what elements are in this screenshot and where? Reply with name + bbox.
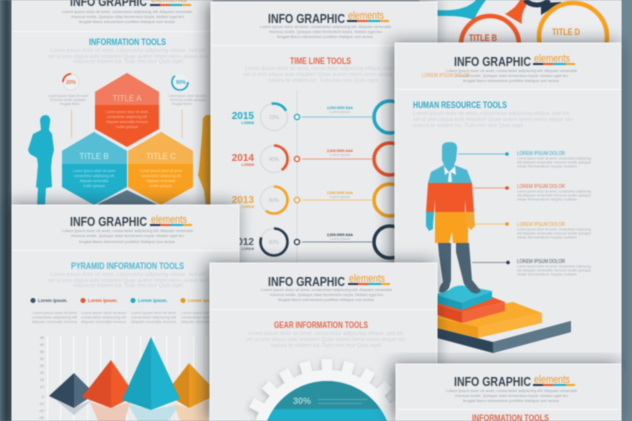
- row: 2013: 2013: [232, 195, 254, 206]
- legend descriptions: consectetur adipiscing elit: [131, 316, 176, 320]
- row: 2012: LOREM: [241, 247, 254, 251]
- callout lines and labels: elit aliquam venenatis rhoncus mollis quisque: [517, 160, 591, 164]
- header: elements: [534, 374, 570, 386]
- axis labels: 20: [40, 371, 44, 375]
- header: INFO GRAPHIC: [454, 54, 531, 69]
- panel: gear information tools: [210, 263, 437, 421]
- row: 2013: [232, 184, 406, 216]
- callout lines and labels: Lorem ipsum dolor sit amet, consectetur adipiscing: [517, 156, 591, 160]
- header: [62, 214, 193, 244]
- legend descriptions: Aliquam venenatis rhoncus: [32, 320, 77, 324]
- header: feugiat libero elementum porttitor tristique non lectus: [278, 297, 374, 302]
- header: Lorem ipsum dolor sit amet, consectetur adipiscing elit. Aliquam venenatis: [446, 388, 577, 393]
- pyramid: orange: [82, 360, 133, 408]
- row: 2015: LOREM: [241, 121, 254, 125]
- axis labels: 0: [42, 395, 44, 399]
- axis labels: 40: [40, 343, 44, 347]
- header: INFO GRAPHIC: [268, 11, 345, 26]
- hexagon: title A: mollis quisque: [116, 125, 138, 129]
- legend descriptions: consectetur adipiscing elit: [181, 316, 226, 320]
- captions: [48, 94, 206, 106]
- icon: business person figure: [426, 142, 481, 294]
- captions: feugiat libero: [172, 102, 192, 106]
- callout lines and labels: LOREM IPSUM DOLOR: [517, 259, 565, 265]
- hexagon: title B: [62, 132, 127, 205]
- row: 2014: 40%: [269, 157, 280, 163]
- hexagon: title B: TITLE B: [79, 152, 109, 161]
- hexagon: title B: mollis quisque: [83, 184, 105, 188]
- hexagon: title A: consectetur adipiscing elit: [107, 115, 147, 119]
- header: [62, 0, 192, 24]
- axis labels: -30: [38, 416, 44, 420]
- row: 2014: 2,000.0000 AAA: [327, 149, 353, 153]
- heading: GEAR INFORMATION TOOLS: [274, 320, 368, 330]
- intro text: Lorem ipsum dolor sit amet, consectetur adipiscing elitque, sed elit: [248, 331, 404, 337]
- row: 2015: 20%: [269, 115, 280, 121]
- hexagon: title D, grey: [96, 190, 158, 205]
- intro text: Lorem ipsum dolor sit amet, consectetur adipiscing elitque, sed elit: [50, 272, 206, 278]
- connector: dark: [541, 2, 562, 15]
- callout lines and labels: vitae fermentum turpis nullam: [517, 164, 577, 168]
- chart: pyramid columns: [38, 336, 210, 421]
- hexagon: title B: consectetur adipiscing elit: [74, 174, 114, 178]
- connector: orange: [505, 0, 530, 24]
- legend descriptions: Aliquam venenatis rhoncus: [181, 320, 226, 324]
- intro text: Lorem ipsum dolor sit amet, consectetur adipiscing elitque, sed elit: [50, 48, 206, 54]
- row: 2012: [232, 226, 406, 258]
- callout lines and labels: Lorem ipsum dolor sit amet, consectetur adipiscing: [517, 190, 591, 194]
- legend: Lorem ipsum.: [138, 298, 168, 303]
- panel: information tools bottom right: [396, 364, 621, 421]
- gauge: 20%: 20%: [66, 80, 77, 86]
- header: elements: [534, 53, 570, 65]
- intro text: vel ut sem aliqua aute requiem! Quae autem lorem nemo aeque nec: [246, 337, 407, 343]
- hexagon: title C: TITLE C: [146, 152, 176, 161]
- ring: dark: [525, 0, 549, 5]
- header: feugiat libero elementum porttitor tristique non lectus: [79, 19, 175, 24]
- row: 2014: [232, 143, 406, 175]
- pyramid: teal: [122, 337, 180, 410]
- row: 2015: 2,000.0000 AAA: [327, 106, 353, 110]
- pyramid: amber: [172, 363, 210, 408]
- icon: figure silhouette amber: [198, 115, 212, 205]
- chart: gear: [249, 359, 405, 421]
- header: rhoncus mollis. Quisque vitae fermentum turpis. Nullam eget leo: [270, 292, 384, 297]
- intro text: [246, 331, 407, 349]
- header: rhoncus mollis. Quisque vitae fermentum turpis. Nullam eget leo: [455, 73, 569, 78]
- legend descriptions: Lorem ipsum dolor sit amet: [181, 311, 226, 315]
- reflections: [56, 400, 208, 421]
- legend: Lorem ipsum.: [188, 298, 218, 303]
- callout lines and labels: Lorem ipsum dolor sit amet, consectetur adipiscing: [517, 228, 591, 232]
- header: feugiat libero elementum porttitor tristique non lectus: [277, 34, 373, 39]
- header: [261, 273, 392, 302]
- row: 2013: LOREM: [241, 205, 254, 209]
- heading: HUMAN RESOURCE TOOLS: [413, 100, 507, 110]
- header: rhoncus mollis. Quisque vitae fermentum turpis. Nullam eget leo: [71, 14, 185, 19]
- hexagon: title B: Aliquam venenatis: [80, 179, 109, 183]
- intro text: [48, 272, 209, 289]
- axis labels: 45: [40, 336, 44, 340]
- gauge: 20%: [63, 74, 79, 90]
- panel: top right circles: [420, 0, 621, 74]
- hexagon: title C: Aliquam venenatis: [147, 179, 176, 183]
- row: 2012: 2012: [232, 237, 254, 248]
- legend: [30, 298, 218, 303]
- header: rhoncus mollis. Quisque vitae fermentum turpis. Nullam eget leo: [269, 29, 383, 34]
- header: Lorem ipsum dolor sit amet, consectetur adipiscing elit. Aliquam venenatis: [446, 68, 577, 73]
- pyramid: dark: [49, 373, 92, 408]
- hexagon: title C: consectetur adipiscing elit: [141, 174, 181, 178]
- label: title D: TITLE D: [552, 27, 580, 37]
- hexagon: title C: mollis quisque: [150, 184, 172, 188]
- axis labels: 30: [40, 357, 44, 361]
- ring: title D: [539, 3, 607, 71]
- row: 2015: Lorem ipsum: [330, 110, 350, 114]
- captions: rhoncus mollis quisque: [50, 98, 86, 102]
- intro text: [413, 111, 574, 129]
- legend descriptions: consectetur adipiscing elit: [32, 316, 77, 320]
- intro text: natura te eiatem lor. Tum min mor Quis eget: [413, 123, 524, 129]
- axis labels: 25: [40, 364, 44, 368]
- axis labels: 15: [40, 378, 44, 382]
- row: 2013: 60%: [269, 198, 280, 204]
- row: 2012: Lorem ipsum: [330, 237, 350, 241]
- intro text: Lorem ipsum dolor sit amet, consectetur adipiscing elitque, sed elit: [413, 111, 570, 117]
- intro text: vel ut sem aliqua aute requiem! Quae autem lorem nemo aeque nec: [48, 54, 209, 60]
- row: 2014: LOREM: [241, 163, 254, 167]
- callout lines and labels: vitae fermentum turpis nullam: [517, 272, 577, 276]
- intro text: natura te eiatem lor. Tum min mor Quis eget: [268, 78, 379, 84]
- hexagon: title A: TITLE A: [113, 94, 142, 103]
- intro text: natura te eiatem lor. Tum min mor Quis eget: [73, 59, 184, 65]
- row: 2012: 2,000.0000 AAA: [327, 233, 353, 237]
- callout lines and labels: vitae fermentum turpis nullam: [517, 236, 577, 240]
- axis labels: 35: [40, 350, 44, 354]
- header: [260, 10, 391, 39]
- header: [446, 374, 577, 403]
- axis labels: [38, 336, 44, 420]
- gauge: 90%: 90%: [176, 80, 187, 86]
- header: [446, 53, 577, 83]
- row: 2012: 80%: [269, 240, 280, 246]
- legend descriptions: Aliquam venenatis rhoncus: [131, 320, 176, 324]
- captions: Lorem ipsum dolor sit amet: [168, 94, 206, 98]
- hexagon: title A: Aliquam venenatis rhoncus: [106, 120, 148, 124]
- intro text: vel ut sem aliqua aute requiem! Quae autem lorem nemo aeque nec: [413, 117, 574, 123]
- intro text: [243, 66, 404, 84]
- header: Lorem ipsum dolor sit amet, consectetur adipiscing elit. Aliquam venenatis: [260, 24, 391, 29]
- hexagon: title C: [128, 132, 193, 205]
- captions: rhoncus mollis quisque: [170, 98, 206, 102]
- legend descriptions: Lorem ipsum dolor sit amet: [32, 311, 77, 315]
- hexagon: title B: Lorem ipsum dolor sit amet: [73, 169, 115, 173]
- panel: time line tools: [211, 2, 437, 264]
- header: INFO GRAPHIC: [454, 374, 531, 389]
- heading: TIME LINE TOOLS: [290, 56, 351, 66]
- callout lines and labels: elit aliquam venenatis rhoncus mollis quisque: [517, 194, 591, 198]
- row: 2014: 2014: [232, 153, 254, 164]
- legend descriptions: Lorem ipsum dolor sit amet: [81, 311, 126, 315]
- callout lines and labels: elit aliquam venenatis rhoncus mollis quisque: [517, 268, 591, 272]
- hexagon: title A: [95, 73, 159, 147]
- captions: Lorem ipsum dolor sit amet: [48, 94, 88, 98]
- intro text: natura te eiatem lor. Tum min mor Quis eget: [271, 343, 382, 349]
- legend descriptions: Lorem ipsum dolor sit amet: [131, 311, 176, 315]
- dial value: 30%: [293, 396, 311, 406]
- header: rhoncus mollis. Quisque vitae fermentum turpis. Nullam eget leo: [455, 393, 569, 398]
- row: 2013: 2,000.0000 AAA: [327, 191, 353, 195]
- captions: feugiat libero: [60, 102, 80, 106]
- gear dial: [267, 381, 387, 421]
- header: Lorem ipsum dolor sit amet, consectetur adipiscing elit. Aliquam venenatis: [62, 9, 192, 14]
- callout lines and labels: LOREM IPSUM DOLOR: [517, 151, 565, 157]
- header: elements: [348, 10, 384, 22]
- axis labels: -10: [38, 402, 44, 406]
- intro text: natura te eiatem lor. Tum min mor Quis eget: [73, 283, 184, 289]
- legend: Lorem ipsum.: [38, 298, 68, 303]
- intro text: [48, 48, 209, 65]
- label: title B: TITLE B: [469, 33, 497, 43]
- intro text: vel ut sem aliqua aute requiem! Quae autem lorem nemo aeque nec: [243, 72, 404, 78]
- connector: teal: [437, 0, 486, 20]
- legend descriptions: Aliquam venenatis rhoncus: [81, 320, 126, 324]
- row: 2015: 2015: [232, 111, 254, 122]
- panel: human resource tools: [395, 43, 621, 365]
- steps: isometric platform: [437, 286, 571, 353]
- icon: woman silhouette teal: [28, 115, 54, 205]
- callout lines and labels: [458, 151, 591, 276]
- callout lines and labels: LOREM IPSUM DOLOR: [517, 222, 565, 228]
- intro text: vel ut sem aliqua aute requiem! Quae autem lorem nemo aeque nec: [48, 278, 209, 284]
- ring: title B: [461, 16, 519, 74]
- axis labels: 10: [40, 385, 44, 389]
- callout lines and labels: elit aliquam venenatis rhoncus mollis quisque: [517, 232, 591, 236]
- hexagon: title A: Lorem ipsum dolor sit amet: [106, 110, 148, 114]
- header: INFO GRAPHIC: [70, 214, 147, 229]
- panel: information tools hexagons: [12, 0, 212, 205]
- header: elements: [349, 273, 385, 285]
- header: INFO GRAPHIC: [268, 274, 345, 289]
- row: 2013: Lorem ipsum: [330, 195, 350, 199]
- callout lines and labels: LOREM IPSUM DOLOR: [517, 184, 565, 190]
- heading: PYRAMID INFORMATION TOOLS: [71, 261, 184, 271]
- callout lines and labels: vitae fermentum turpis nullam: [517, 198, 577, 202]
- heading: INFORMATION TOOLS: [89, 37, 166, 47]
- ghost label: LOREM IPSUM DOLOR: [422, 73, 470, 79]
- row: 2014: Lorem ipsum: [330, 153, 350, 157]
- panel: pyramid information tools: [12, 205, 239, 421]
- header: Lorem ipsum dolor sit amet, consectetur adipiscing elit. Aliquam venenatis: [62, 228, 193, 233]
- header: rhoncus mollis. Quisque vitae fermentum turpis. Nullam eget leo: [71, 233, 185, 238]
- axis labels: -20: [38, 409, 44, 413]
- legend: Lorem ipsum.: [88, 298, 118, 303]
- callout lines and labels: Lorem ipsum dolor sit amet, consectetur adipiscing: [517, 264, 591, 268]
- header: elements: [151, 214, 187, 226]
- hexagon: title C: Lorem ipsum dolor sit amet: [140, 169, 182, 173]
- header: feugiat libero elementum porttitor tristique non lectus: [463, 398, 559, 403]
- legend descriptions: [32, 311, 226, 324]
- header: feugiat libero elementum porttitor tristique non lectus: [463, 78, 559, 83]
- header: feugiat libero elementum porttitor tristique non lectus: [79, 239, 175, 244]
- row: 2015: [232, 101, 406, 133]
- legend descriptions: consectetur adipiscing elit: [81, 316, 126, 320]
- intro text: Lorem ipsum dolor sit amet, consectetur adipiscing elitque, sed elit: [245, 66, 401, 72]
- gauge: 90%: [172, 74, 188, 90]
- header: Lorem ipsum dolor sit amet, consectetur adipiscing elit. Aliquam venenatis: [261, 287, 392, 292]
